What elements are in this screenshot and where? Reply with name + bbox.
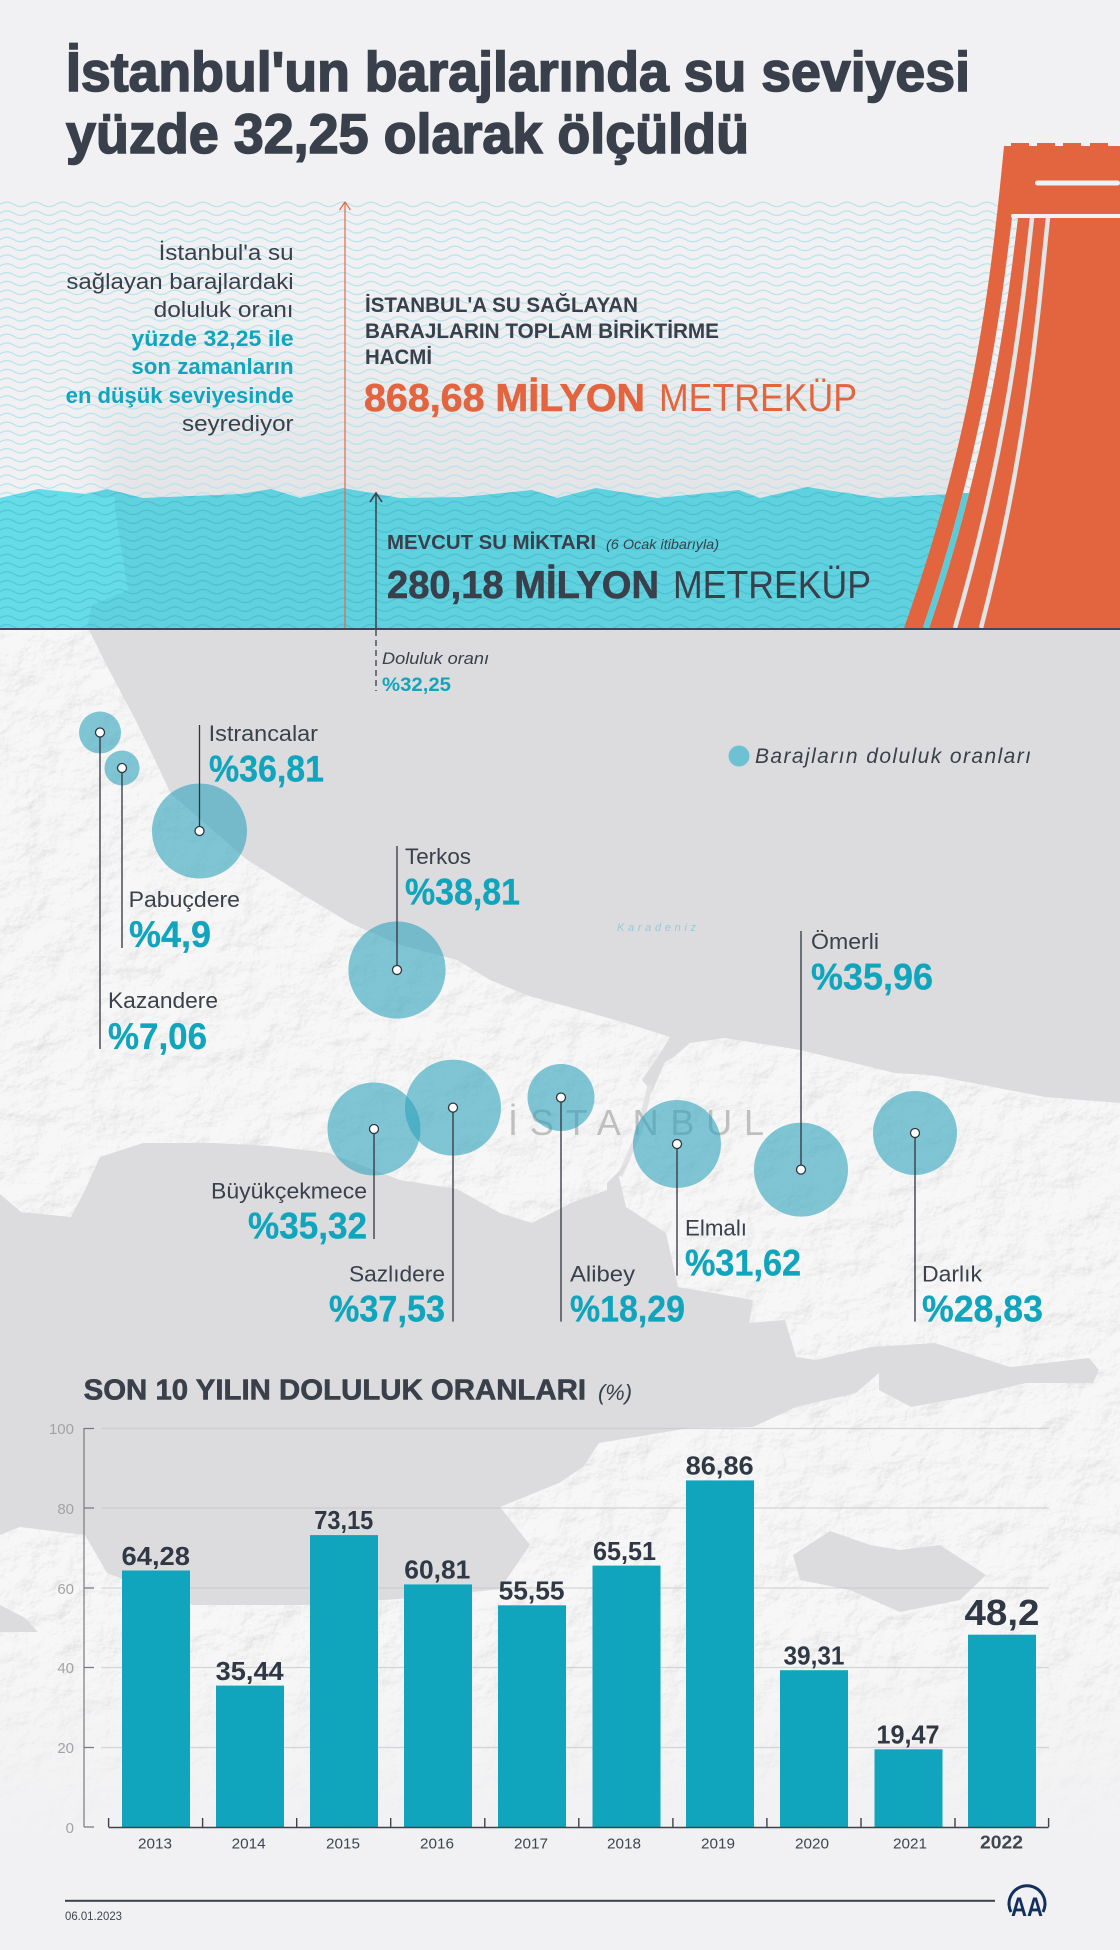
bar values: 64,28 [122,1541,190,1571]
bar values: 55,55 [499,1576,565,1606]
dam: Büyükçekmece: Büyükçekmece [211,1178,367,1204]
dam: Sazlıdere: %37,53 [329,1289,445,1330]
dam: Elmalı [633,1100,801,1284]
dam: Kazandere: Kazandere [108,988,218,1013]
footer line [65,1900,995,1902]
year labels: 2017 [514,1836,548,1853]
bar values: 39,31 [784,1640,844,1670]
grid and axes [49,1421,1049,1837]
year labels: 2019 [701,1836,735,1853]
text block: summary: son zamanların [131,354,294,379]
dam: Ömerli: %35,96 [811,957,933,998]
text block: fill ratio [382,649,489,696]
title: İstanbulʹun barajlarında su seviyesi [66,40,970,103]
dam: Darlık [873,1091,1043,1330]
text block: current water: METREKÜP [673,564,871,607]
text block: summary: sağlayan barajlardaki [66,269,294,294]
icon: AA logo: AA [1011,1892,1043,1922]
year labels: 2018 [607,1836,641,1853]
dam: Pabuçdere: %4,9 [129,914,211,955]
bar values: 60,81 [404,1554,470,1584]
title: yüzde 32,25 olarak ölçüldü [66,102,749,165]
bars [122,1480,1036,1827]
x axis [109,1818,1049,1828]
year labels: 2022 [980,1833,1023,1853]
bar values [122,1450,1040,1750]
grid and axes: 0 [66,1820,74,1837]
text block: current water: (6 Ocak itibarıyla) [606,536,719,552]
text block: summary: en düşük seviyesinde [66,383,294,408]
dam: Kazandere: %7,06 [108,1016,207,1057]
text block: total capacity: İSTANBULʹA SU SAĞLAYAN [365,293,638,317]
dam: Alibey: %18,29 [570,1289,685,1330]
dam: Kazandere [79,712,218,1057]
dam: Büyükçekmece [211,1082,420,1246]
bar chart [49,1421,1049,1853]
grid and axes: 60 [57,1581,74,1598]
text block: total capacity: BARAJLARIN TOPLAM BİRİKTİRME [365,320,719,343]
dam: Terkos [348,844,520,1019]
dam: Terkos: %38,81 [405,872,520,913]
dam [904,143,1120,628]
bar values: 35,44 [216,1656,284,1686]
arrow: current water [370,493,382,691]
dam: Sazlıdere [329,1060,501,1330]
grid and axes: 100 [49,1421,74,1438]
year labels [138,1833,1023,1853]
label: İstanbul: İSTANBUL [508,1102,764,1143]
bar values: 86,86 [686,1450,754,1480]
text block: current water [387,531,871,607]
text block: summary: yüzde 32,25 ile [131,326,294,351]
bar values: 65,51 [593,1536,656,1566]
bar values: 48,2 [964,1592,1040,1633]
year labels: 2016 [420,1836,454,1853]
grid and axes: 40 [57,1660,74,1677]
dam: Ömerli [754,929,933,1217]
dam: Alibey: Alibey [570,1262,635,1287]
text block: summary: seyrediyor [182,411,294,436]
text block: total capacity: METREKÜP [659,377,857,420]
map background [0,630,1120,1852]
bar values: 73,15 [314,1505,373,1535]
date: 06.01.2023 [65,1911,122,1923]
dam: Istrancalar: %36,81 [209,749,324,790]
dam: Pabuçdere: Pabuçdere [129,887,240,912]
text block: summary: doluluk oranı [154,297,294,322]
chart heading: (%) [598,1380,632,1405]
dam: Elmalı: Elmalı [685,1216,747,1241]
dam: Elmalı: %31,62 [685,1243,801,1284]
dam: Alibey [528,1064,685,1330]
bar values: 19,47 [876,1720,940,1750]
text block: current water: 280,18 MİLYON [387,564,659,607]
wave pattern [0,200,1010,505]
panel: dam and water level [0,143,1120,691]
dam: Darlık: %28,83 [922,1289,1043,1330]
arrow: total capacity [340,202,350,628]
legend: Barajların doluluk oranları [755,745,1031,768]
year labels: 2013 [138,1836,172,1853]
chart heading: SON 10 YILIN DOLULUK ORANLARI [84,1374,586,1406]
title [66,40,970,165]
year labels: 2020 [795,1836,829,1853]
year labels: 2021 [893,1836,927,1853]
grid and axes: 20 [57,1740,74,1757]
text block: summary [66,240,294,436]
dam: Darlık: Darlık [922,1262,983,1287]
text block: summary: İstanbulʹa su [159,240,294,265]
dam: Pabuçdere [104,750,240,955]
year labels: 2014 [232,1836,266,1853]
text block: total capacity: HACMİ [365,346,432,369]
dam: Istrancalar [152,721,324,878]
label: Karadeniz: Karadeniz [617,922,696,934]
panel: dam map [79,712,1043,1330]
dam: Terkos: Terkos [405,844,471,869]
grid and axes: 80 [57,1501,74,1518]
text block: total capacity [364,293,857,420]
water [0,487,1000,628]
dam: Ömerli: Ömerli [811,929,879,954]
text block: current water: MEVCUT SU MİKTARI [387,531,596,554]
dam: Büyükçekmece: %35,32 [248,1206,367,1246]
text block: total capacity: 868,68 MİLYON [364,377,645,420]
dam: Sazlıdere: Sazlıdere [349,1262,445,1287]
year labels: 2015 [326,1836,360,1853]
text block: fill ratio: %32,25 [382,675,451,696]
text block: fill ratio: Doluluk oranı [382,649,489,668]
dam: Istrancalar: Istrancalar [209,721,318,746]
baseline [0,628,1120,630]
